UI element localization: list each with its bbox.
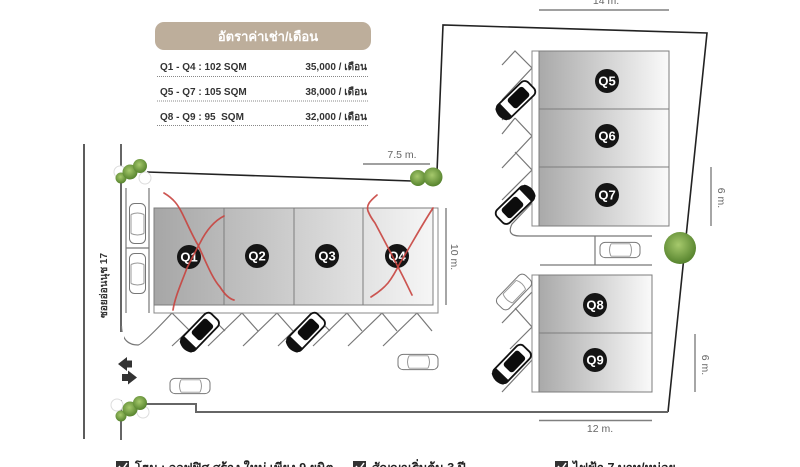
tree cluster bottom left	[111, 396, 149, 422]
rent row Q5-Q7: Q5 - Q7 : 105 SQM	[160, 87, 247, 98]
unit Q1	[177, 245, 201, 269]
large tree	[664, 232, 696, 264]
dimension 7.5 m: 7.5 m.	[387, 149, 417, 161]
dimension 12 m: 12 m.	[587, 423, 613, 435]
tree cluster centre	[410, 168, 442, 186]
rent row Q8-Q9	[157, 111, 368, 126]
feature: contract	[353, 459, 466, 467]
building block Q8-Q9	[532, 275, 652, 392]
rent row Q1-Q4	[157, 61, 368, 76]
dimension 10 m: 10 m.	[448, 244, 460, 270]
road gap mask	[118, 332, 124, 400]
table heading: อัตราค่าเช่า/เดือน	[218, 29, 318, 44]
building block Q1-Q4	[154, 208, 438, 313]
dimension 14 m	[539, 0, 669, 10]
unit Q6: Q6	[598, 128, 616, 144]
dimension 12 m	[539, 420, 652, 435]
unit Q7	[595, 183, 619, 207]
dimension 6 m lower: 6 m.	[699, 355, 711, 375]
rent row Q5-Q7	[157, 86, 368, 101]
rent row Q8-Q9: 32,000 / เดือน	[305, 111, 367, 123]
building block Q5-Q7	[532, 51, 669, 226]
unit Q2: Q2	[248, 248, 266, 264]
curbs and parking lines	[122, 51, 652, 392]
unit Q4	[385, 244, 409, 268]
unit Q4: Q4	[388, 248, 406, 264]
rent row Q8-Q9: Q8 - Q9 : 95 SQM	[160, 112, 244, 123]
rent row Q1-Q4: 35,000 / เดือน	[305, 61, 367, 73]
direction arrows	[118, 357, 137, 384]
unit Q6	[595, 124, 619, 148]
unit Q9: Q9	[586, 352, 604, 368]
road name: ซอยอ่อนนุช 17	[98, 253, 110, 318]
unit Q8: Q8	[586, 298, 604, 312]
table heading	[155, 22, 371, 50]
rent row Q5-Q7: 38,000 / เดือน	[305, 86, 367, 98]
rent table	[155, 22, 371, 126]
site boundary walls	[84, 25, 707, 440]
dimension 10 m	[446, 208, 460, 305]
red cross over Q1	[164, 193, 234, 310]
unit Q5: Q5	[598, 74, 616, 88]
parked cars	[130, 79, 640, 394]
unit Q7: Q7	[598, 188, 616, 202]
dimension 6 m upper	[711, 167, 727, 226]
red cross over Q4	[367, 195, 433, 297]
dimension 6 m lower	[695, 334, 711, 392]
rent row Q1-Q4: Q1 - Q4 : 102 SQM	[160, 62, 247, 73]
dimension 7.5 m	[363, 149, 430, 164]
unit Q3: Q3	[318, 248, 336, 264]
unit Q1: Q1	[180, 250, 198, 264]
unit Q2	[245, 244, 269, 268]
unit Q5	[595, 69, 619, 93]
dimension 6 m upper: 6 m.	[715, 188, 727, 208]
unit Q3	[315, 244, 339, 268]
tree cluster top left	[114, 159, 151, 184]
